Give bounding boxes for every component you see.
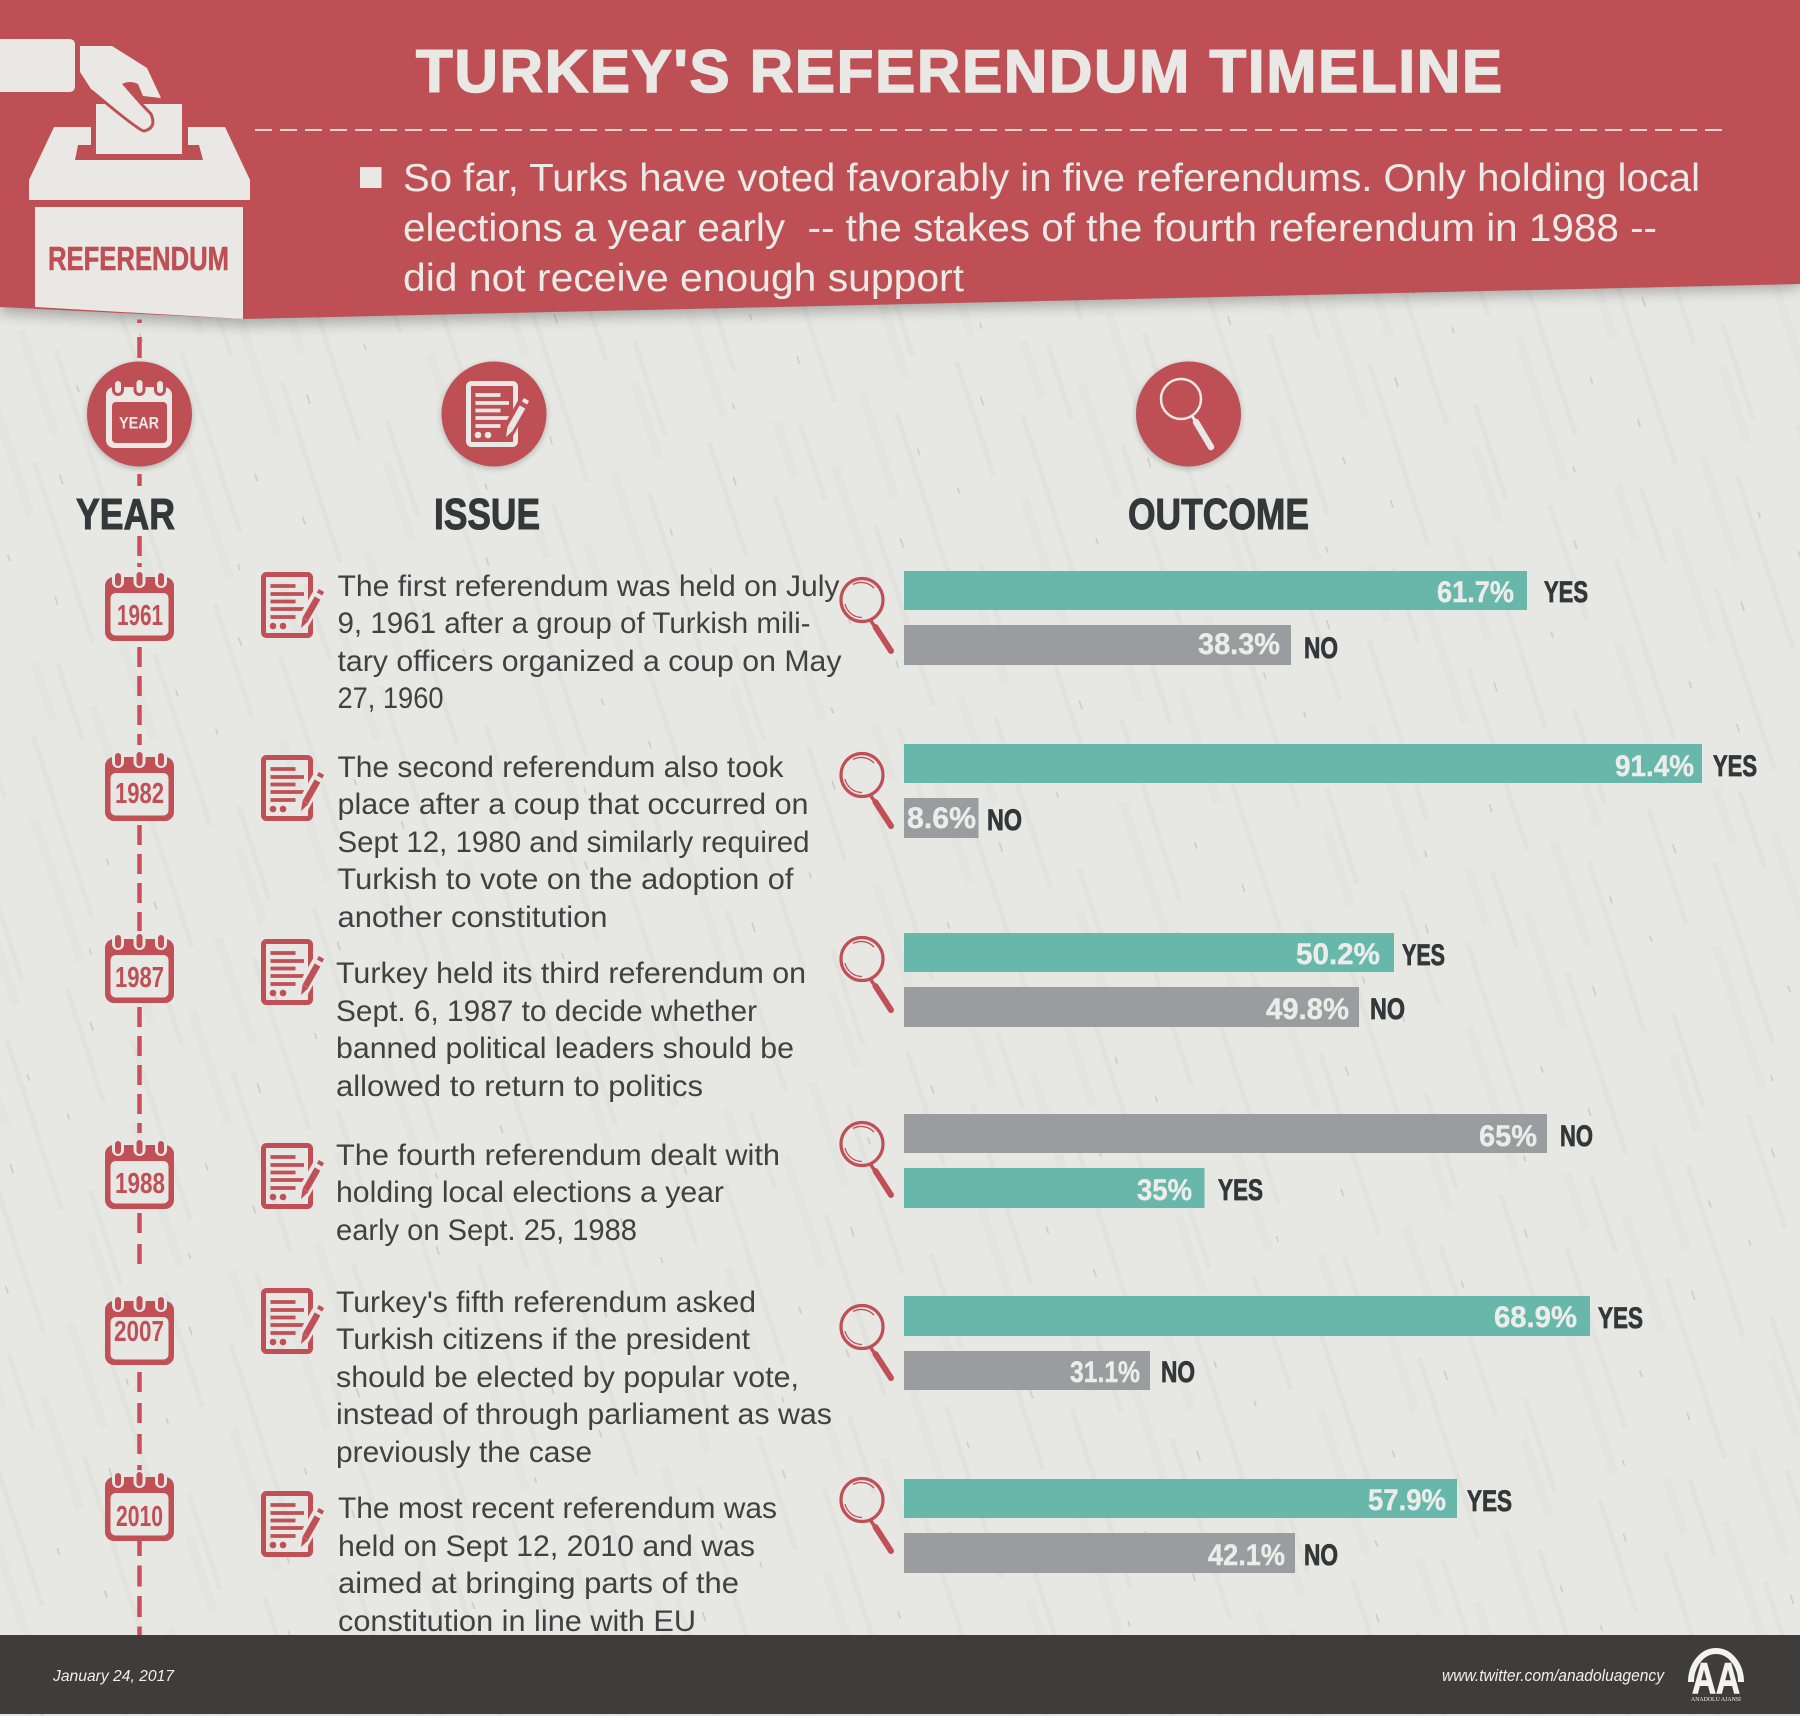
icon: calendar 1982 <box>105 750 174 821</box>
dashed divider <box>255 129 1725 131</box>
title: TURKEY'S REFERENDUM TIMELINE <box>416 38 1502 105</box>
bar chart: 1982 outcome: NO <box>987 804 1022 837</box>
icon: calendar 2007 <box>105 1294 174 1365</box>
bar chart: 1982 outcome: YES <box>1713 750 1757 783</box>
outcome heading: OUTCOME <box>1128 490 1309 539</box>
bar chart: 1961 outcome <box>904 571 1588 665</box>
issue text: allowed to return to politics <box>336 1070 703 1103</box>
icon: magnifier <box>841 1122 891 1195</box>
issue text <box>338 1492 777 1638</box>
icon: issue note <box>264 1494 322 1554</box>
issue text <box>336 957 806 1103</box>
issue text: Turkish to vote on the adoption of <box>338 863 794 896</box>
year heading: YEAR <box>76 490 175 539</box>
bar chart: 2007 outcome: YES <box>1598 1302 1643 1335</box>
bar chart: 1988 outcome: YES <box>1218 1174 1263 1207</box>
issue text: constitution in line with EU <box>338 1605 696 1638</box>
bar chart: 2010 outcome: NO <box>1304 1539 1338 1572</box>
issue text <box>338 570 842 715</box>
issue text: Sept 12, 1980 and similarly required <box>338 826 810 859</box>
issue text: aimed at bringing parts of the <box>338 1567 739 1600</box>
icon: issue note <box>264 1146 322 1206</box>
icon: ballot box with hand <box>0 39 250 319</box>
icon: calendar 1988: 1988 <box>115 1168 165 1200</box>
icon: magnifier <box>841 938 891 1010</box>
bar chart: 1987 outcome <box>904 933 1445 1027</box>
issue text <box>336 1139 780 1247</box>
issue text <box>338 751 810 934</box>
bar chart: 1961 outcome: 61.7% <box>1437 576 1514 609</box>
issue text: place after a coup that occurred on <box>338 788 808 821</box>
issue text: early on Sept. 25, 1988 <box>336 1214 637 1247</box>
issue text: Turkey held its third referendum on <box>336 957 806 990</box>
issue text: Turkey's fifth referendum asked <box>336 1286 756 1319</box>
intro text: did not receive enough support <box>403 257 964 300</box>
bar chart: 1988 outcome: NO <box>1560 1120 1593 1153</box>
panel: column headers <box>76 362 1309 539</box>
logo: Anadolu Agency: ANADOLU AJANSI <box>1691 1696 1741 1703</box>
panel: row 2010 <box>105 1470 1512 1638</box>
issue text: The second referendum also took <box>338 751 784 784</box>
bar chart: 1961 outcome: NO <box>1304 632 1338 665</box>
bar chart: 1988 outcome: 35% <box>1137 1174 1192 1207</box>
panel: footer <box>0 1635 1800 1714</box>
bar chart: 2007 outcome: 68.9% <box>1494 1301 1577 1334</box>
issue text: 9, 1961 after a group of Turkish mili- <box>338 607 810 640</box>
panel: row 1961 <box>105 570 1588 715</box>
icon: calendar 1961: 1961 <box>117 600 163 632</box>
issue text: holding local elections a year <box>336 1176 724 1209</box>
bar chart: 2010 outcome: 57.9% <box>1368 1484 1446 1517</box>
icon: outcome circle <box>1136 362 1242 469</box>
issue text: held on Sept 12, 2010 and was <box>338 1530 755 1563</box>
issue text: 27, 1960 <box>338 682 444 715</box>
bar chart: 2010 outcome: YES <box>1467 1485 1512 1518</box>
issue text: Sept. 6, 1987 to decide whether <box>336 995 757 1028</box>
icon: calendar 2010: 2010 <box>116 1501 163 1533</box>
panel: row 1988 <box>105 1114 1593 1247</box>
bar chart: 1987 outcome: YES <box>1402 939 1445 972</box>
bar chart: 1982 outcome: 8.6% <box>907 802 976 835</box>
icon: magnifier <box>841 578 891 651</box>
issue text: The first referendum was held on July <box>338 570 840 603</box>
referendum label: REFERENDUM <box>48 240 229 277</box>
issue text: Turkish citizens if the president <box>336 1323 750 1356</box>
panel: row 2007 <box>105 1286 1643 1469</box>
bar chart: 1987 outcome: 50.2% <box>1296 938 1380 971</box>
icon: calendar 1987: 1987 <box>115 962 164 994</box>
icon: magnifier <box>841 1478 891 1551</box>
bar chart: 1961 outcome: YES <box>1544 576 1588 609</box>
bar chart: 2007 outcome: 31.1% <box>1070 1356 1140 1389</box>
logo: Anadolu Agency: AA <box>1692 1654 1740 1703</box>
timeline dashed line <box>137 320 142 1640</box>
bar chart: 1982 outcome: 91.4% <box>1615 750 1694 783</box>
panel: row 1982 <box>105 744 1757 934</box>
issue text: instead of through parliament as was <box>336 1398 832 1431</box>
icon: calendar 1988 <box>105 1138 174 1209</box>
icon: issue note <box>264 1290 322 1352</box>
icon: magnifier <box>841 754 891 826</box>
icon: calendar 2007: 2007 <box>114 1316 164 1348</box>
panel: row 1987 <box>105 932 1445 1103</box>
icon: calendar 1982: 1982 <box>115 778 164 810</box>
icon: calendar 2010 <box>105 1470 174 1541</box>
bullet <box>360 167 382 188</box>
intro text <box>403 157 1700 300</box>
icon: issue note <box>264 574 322 636</box>
issue text: previously the case <box>336 1436 592 1469</box>
intro text: So far, Turks have voted favorably in five referendums. Only holding local <box>403 157 1700 200</box>
icon: issue note <box>264 758 322 818</box>
issue text <box>336 1286 832 1469</box>
icon: year circle: YEAR <box>119 414 159 432</box>
issue text: banned political leaders should be <box>336 1032 794 1065</box>
icon: year circle <box>86 362 192 469</box>
panel: header banner <box>0 0 1800 319</box>
bar chart: 1988 outcome: 65% <box>1479 1120 1537 1153</box>
icon: issue circle <box>441 362 547 469</box>
icon: issue note <box>264 942 322 1002</box>
twitter url: www.twitter.com/anadoluagency <box>1442 1666 1665 1685</box>
issue text: The most recent referendum was <box>338 1492 777 1525</box>
issue heading: ISSUE <box>434 490 540 539</box>
bar chart: 2010 outcome: 42.1% <box>1208 1539 1285 1572</box>
icon: calendar 1961 <box>105 570 174 641</box>
bar chart: 1988 outcome <box>904 1114 1593 1208</box>
issue text: should be elected by popular vote, <box>336 1361 799 1394</box>
bar chart: 2007 outcome: NO <box>1161 1356 1195 1389</box>
bar chart: 1961 outcome: 38.3% <box>1198 628 1280 661</box>
issue text: The fourth referendum dealt with <box>336 1139 780 1172</box>
bar chart: 2010 outcome <box>904 1479 1512 1573</box>
bar chart: 1987 outcome: 49.8% <box>1266 993 1349 1026</box>
intro text: elections a year early -- the stakes of the fourth referendum in 1988 -- <box>403 207 1657 250</box>
bar chart: 1982 outcome <box>904 744 1757 838</box>
bar chart: 1987 outcome: NO <box>1370 993 1405 1026</box>
icon: calendar 1987 <box>105 932 174 1003</box>
icon: magnifier <box>841 1306 891 1378</box>
header shadow <box>0 0 1800 325</box>
bar chart: 2007 outcome <box>904 1296 1643 1390</box>
issue text: another constitution <box>338 901 608 934</box>
issue text: tary officers organized a coup on May <box>338 645 842 678</box>
date: January 24, 2017 <box>52 1668 175 1685</box>
